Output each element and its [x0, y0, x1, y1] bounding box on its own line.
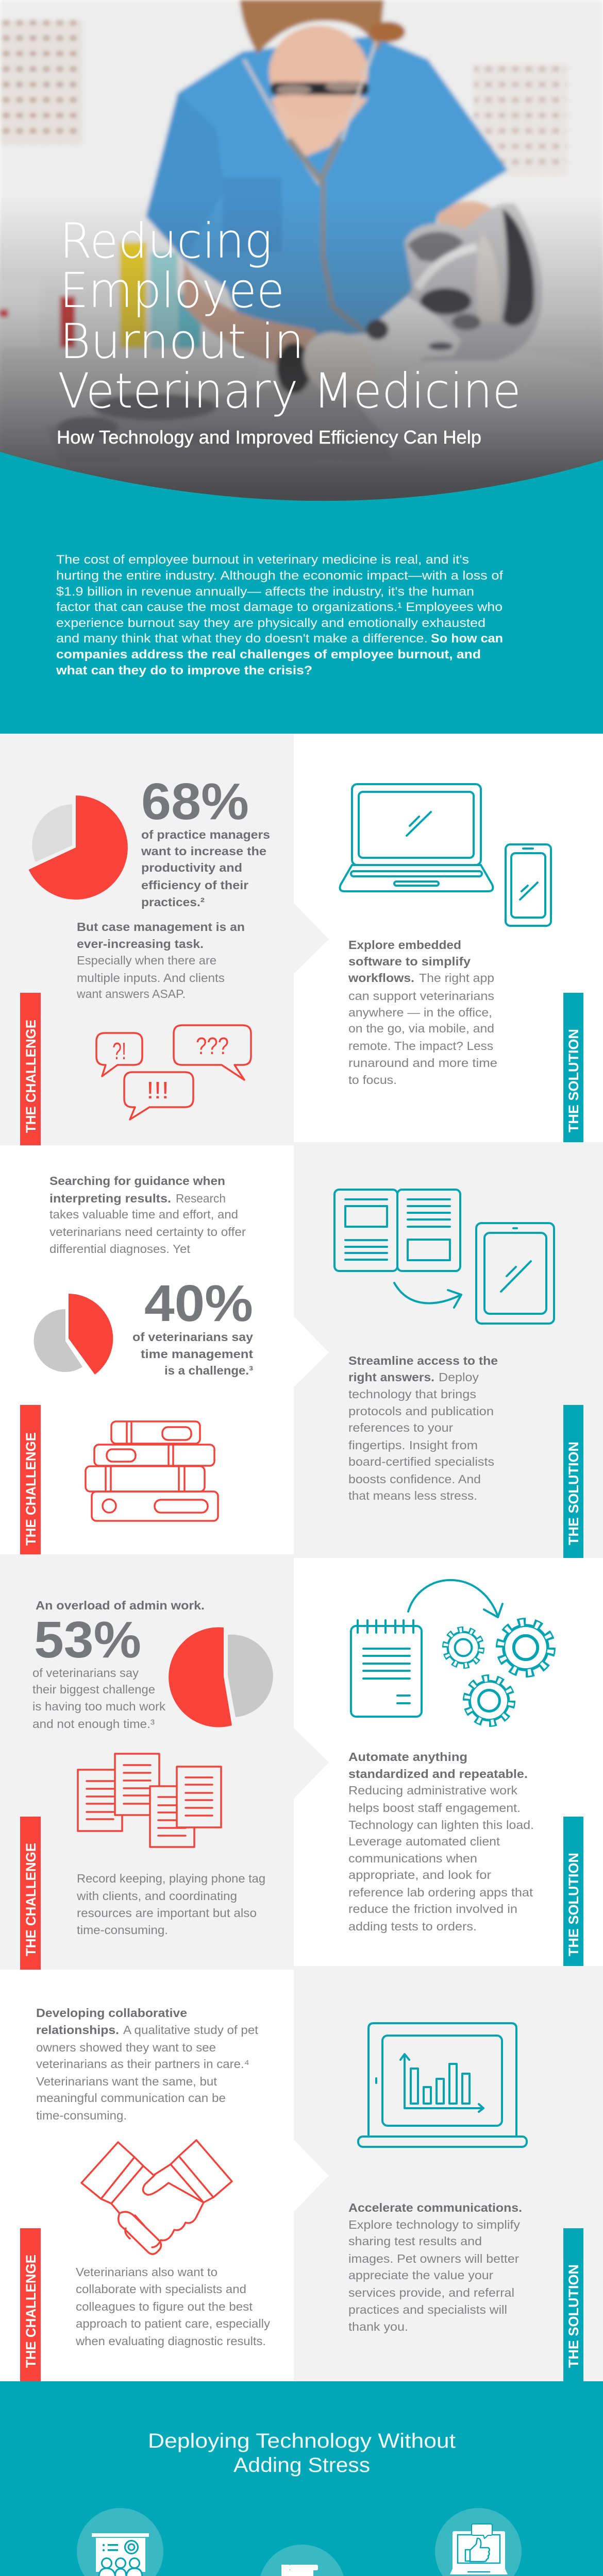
challenge text: [76, 920, 245, 1001]
panel: deploying technology: [0, 2381, 603, 2576]
stat caption: of veterinarians say: [32, 1666, 139, 1680]
solution text: board-certified specialists: [348, 1455, 494, 1468]
icon: handshake: [81, 2140, 232, 2254]
stat: 68%: 68%: [141, 773, 249, 831]
tag: the challenge: [20, 1817, 41, 1970]
tag: the solution: THE SOLUTION: [566, 1442, 581, 1545]
challenge text: meaningful communication can be: [36, 2091, 226, 2105]
challenge text: resources are important but also: [77, 1906, 257, 1920]
solution text: Automate anything: [348, 1750, 467, 1764]
solution text: [348, 2201, 522, 2333]
challenge text: Veterinarians also want to: [76, 2265, 217, 2279]
intro paragraph: hurting the entire industry. Although the economic impact—with a loss of: [56, 569, 503, 583]
intro paragraph: experience burnout say they are physically and emotionally exhausted: [56, 616, 485, 630]
intro paragraph: what can they do to improve the crisis?: [56, 664, 312, 677]
panel: challenge and solution 2: [20, 1142, 603, 1558]
title: Veterinary Medicine: [58, 363, 521, 419]
stat caption: their biggest challenge: [32, 1683, 155, 1696]
panel: challenge and solution 3: [0, 1554, 583, 1970]
challenge text: when evaluating diagnostic results.: [75, 2334, 266, 2348]
stat caption: of veterinarians say: [132, 1330, 253, 1344]
icon: book to tablet: [334, 1190, 554, 1324]
tag: the challenge: [20, 2228, 41, 2381]
tag: the solution: [563, 1817, 583, 1970]
challenge text: A qualitative study of pet: [123, 2023, 259, 2037]
challenge text: Veterinarians want the same, but: [36, 2075, 217, 2088]
solution text: runaround and more time: [348, 1056, 497, 1070]
title: [58, 213, 521, 419]
tag: the solution: THE SOLUTION: [566, 2264, 581, 2368]
challenge text: multiple inputs. And clients: [77, 971, 225, 985]
solution text: Explore embedded: [348, 938, 461, 952]
solution text: standardized and repeatable.: [348, 1767, 528, 1781]
solution text: on the go, via mobile, and: [348, 1022, 494, 1035]
hero photo: vet examining dog: [0, 0, 603, 507]
solution text: right answers.: [348, 1370, 434, 1384]
solution text: communications when: [348, 1852, 477, 1865]
solution text: services provide, and referral: [348, 2286, 514, 2299]
solution text: reference lab ordering apps that: [348, 1886, 533, 1899]
title: Employee: [60, 263, 284, 319]
stat caption: of practice managers: [141, 828, 270, 841]
challenge text: differential diagnoses. Yet: [49, 1242, 191, 1256]
stat: 40%: 40%: [144, 1275, 253, 1332]
stat caption: and not enough time.³: [32, 1717, 155, 1731]
stat caption: want to increase the: [141, 844, 266, 858]
tag: the challenge: [20, 993, 41, 1145]
solution text: fingertips. Insight from: [348, 1438, 478, 1452]
intro paragraph: factor that can cause the most damage to organizations.¹ Employees who: [56, 600, 502, 614]
solution text: to focus.: [348, 1073, 397, 1087]
intro paragraph: So how can: [431, 632, 503, 646]
tag: the solution: THE SOLUTION: [566, 1029, 581, 1132]
intro paragraph: The cost of employee burnout in veterinary medicine is real, and it's: [56, 553, 469, 567]
tag: the solution: [563, 993, 583, 1145]
tag: the challenge: THE CHALLENGE: [23, 2255, 39, 2368]
icon: laptop with thumbs up: [435, 2508, 522, 2576]
solution text: [348, 1354, 498, 1502]
solution text: Technology can lighten this load.: [348, 1818, 534, 1832]
solution text: protocols and publication: [348, 1404, 494, 1418]
icon: speech bubbles: [96, 1025, 251, 1120]
solution text: technology that brings: [348, 1387, 476, 1401]
icon: notepad and gears: [351, 1580, 551, 1723]
panel: challenge and solution 1: [0, 734, 583, 1145]
challenge text: takes valuable time and effort, and: [49, 1208, 238, 1221]
stat caption: practices.²: [141, 895, 205, 909]
heading: [148, 2430, 456, 2477]
solution text: adding tests to orders.: [348, 1920, 477, 1933]
solution text: Explore technology to simplify: [348, 2218, 521, 2231]
solution text: thank you.: [348, 2320, 408, 2333]
solution text: Reducing administrative work: [348, 1784, 518, 1797]
solution text: references to your: [348, 1421, 453, 1434]
challenge text: Especially when there are: [77, 954, 216, 967]
heading: Deploying Technology Without: [148, 2430, 456, 2452]
challenge text: But case management is an: [77, 920, 245, 934]
challenge text: approach to patient care, especially: [76, 2317, 271, 2330]
challenge text: want answers ASAP.: [76, 987, 186, 1001]
challenge heading: An overload of admin work.: [36, 1599, 205, 1612]
intro paragraph: [56, 553, 503, 677]
challenge text: [49, 1174, 246, 1256]
subtitle: How Technology and Improved Efficiency Can Help: [57, 427, 481, 448]
challenge text: interpreting results.: [49, 1192, 171, 1205]
solution text: that means less stress.: [348, 1489, 477, 1502]
stat caption: is a challenge.³: [164, 1364, 253, 1377]
icon: presentation board: [77, 2508, 163, 2576]
intro paragraph: $1.9 billion in revenue annually— affects the industry, it's the human: [56, 585, 474, 599]
challenge text: Developing collaborative: [36, 2006, 187, 2020]
challenge text: Record keeping, playing phone tag: [77, 1872, 265, 1885]
icon: paper documents: [78, 1754, 221, 1847]
solution text: Leverage automated client: [348, 1835, 500, 1848]
tag: the solution: THE SOLUTION: [566, 1853, 581, 1956]
solution text: sharing test results and: [348, 2234, 482, 2248]
icon: laptop and phone: [340, 784, 551, 926]
challenge text: colleagues to figure out the best: [76, 2300, 253, 2313]
stat caption: productivity and: [141, 861, 242, 874]
solution text: appreciate the value your: [348, 2268, 493, 2282]
solution text: helps boost staff engagement.: [348, 1801, 521, 1815]
stat caption: is having too much work: [32, 1700, 166, 1713]
challenge text: ever-increasing task.: [77, 937, 204, 951]
solution text: software to simplify: [348, 955, 471, 968]
challenge text: [75, 2265, 271, 2348]
challenge text: collaborate with specialists and: [76, 2282, 246, 2296]
icon: tablet with bar chart: [358, 2023, 527, 2147]
solution text: boosts confidence. And: [348, 1472, 481, 1486]
challenge text: time-consuming.: [36, 2109, 127, 2122]
stat caption: time management: [141, 1347, 253, 1361]
solution text: can support veterinarians: [348, 989, 494, 1003]
solution text: appropriate, and look for: [348, 1868, 491, 1882]
stat caption: [132, 1330, 253, 1377]
icon: checklist and target: [259, 2545, 345, 2576]
solution text: reduce the friction involved in: [348, 1902, 517, 1916]
challenge text: veterinarians need certainty to offer: [49, 1225, 246, 1239]
title: Reducing: [60, 213, 272, 269]
solution text: Streamline access to the: [348, 1354, 498, 1367]
title: Burnout in: [60, 314, 304, 370]
challenge text: with clients, and coordinating: [76, 1889, 237, 1903]
challenge text: Searching for guidance when: [49, 1174, 225, 1188]
challenge text: relationships.: [36, 2023, 119, 2037]
tag: the solution: [563, 1405, 583, 1558]
tag: the challenge: THE CHALLENGE: [23, 1020, 39, 1133]
solution text: remote. The impact? Less: [348, 1039, 493, 1053]
challenge text: [76, 1872, 265, 1937]
stat caption: [32, 1666, 166, 1731]
solution text: [348, 938, 497, 1087]
pie chart: 53%: [169, 1628, 273, 1727]
heading: Adding Stress: [233, 2454, 370, 2477]
challenge text: time-consuming.: [77, 1923, 168, 1937]
tag: the challenge: THE CHALLENGE: [23, 1843, 39, 1956]
solution text: Deploy: [439, 1370, 479, 1384]
solution text: [348, 1750, 534, 1933]
intro paragraph: companies address the real challenges of employee burnout, and: [56, 648, 481, 662]
stat caption: efficiency of their: [141, 878, 248, 892]
challenge text: veterinarians as their partners in care.⁴: [36, 2057, 249, 2071]
solution text: anywhere — in the office,: [348, 1006, 492, 1019]
solution text: The right app: [419, 971, 494, 985]
icon: stack of books: [86, 1421, 218, 1521]
tag: the challenge: [20, 1405, 41, 1558]
pie chart: 40%: [34, 1294, 113, 1375]
challenge text: owners showed they want to see: [36, 2041, 216, 2054]
challenge text: Research: [176, 1192, 226, 1205]
panel: challenge and solution 4: [20, 1966, 603, 2381]
solution text: Accelerate communications.: [348, 2201, 522, 2214]
challenge text: [36, 2006, 259, 2122]
icon: speech bubbles: ?!: [112, 1038, 126, 1064]
solution text: images. Pet owners will better: [348, 2252, 519, 2265]
teal intro panel: [0, 452, 603, 734]
icon: speech bubbles: ???: [196, 1032, 229, 1059]
icon: speech bubbles: !!!: [146, 1077, 169, 1104]
pie chart: 68%: [29, 795, 128, 900]
tag: the solution: [563, 2228, 583, 2381]
solution text: workflows.: [348, 971, 414, 985]
tag: the challenge: THE CHALLENGE: [23, 1432, 39, 1546]
solution text: practices and specialists will: [348, 2303, 507, 2316]
stat: 53%: 53%: [34, 1611, 141, 1669]
stat caption: [141, 828, 270, 909]
intro paragraph: and many think that what they do doesn't make a difference.: [56, 632, 428, 646]
